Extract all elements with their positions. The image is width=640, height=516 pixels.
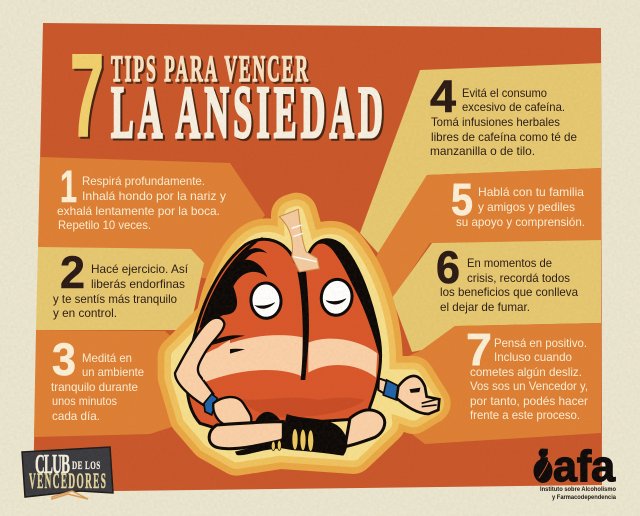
tip 5 text: Hablá con tu familia — [478, 185, 584, 199]
tip 7 text — [470, 336, 588, 422]
left wristband — [204, 394, 217, 415]
right hand — [397, 376, 439, 414]
right leg — [345, 410, 385, 447]
panel: tip 2 — [36, 247, 204, 330]
tip 7 text: Vos sos un Vencedor y, — [470, 379, 588, 393]
tip 4 text — [430, 86, 577, 158]
badge text — [29, 449, 106, 493]
tip 4 text: excesivo de cafeína. — [462, 100, 565, 114]
tip 4 text: Tomá infusiones herbales — [431, 115, 560, 129]
tip 2 text: liberás endorfinas — [91, 277, 185, 291]
right eye — [319, 277, 354, 317]
title — [70, 30, 385, 164]
tip 7 text: frente a este proceso. — [470, 408, 580, 422]
panel: tip 5 — [370, 168, 601, 298]
tip 4 number: 4 — [430, 71, 456, 122]
title line 1: TIPS PARA VENCER — [113, 51, 311, 92]
tip 2 number: 2 — [60, 247, 85, 298]
badge text: CLUB — [35, 449, 70, 479]
tip 3 text: un ambiente — [82, 365, 144, 379]
title line 2: LA ANSIEDAD — [113, 75, 385, 156]
tip 1 text: Inhalá hondo por la nariz y — [82, 189, 226, 203]
logo subtitle: y Farmacodependencia — [552, 494, 616, 501]
tip 4 text: Evitá el consumo — [462, 86, 547, 100]
feet and shadow — [235, 414, 347, 456]
badge text: DE LOS — [72, 459, 101, 473]
right arm and wristband — [378, 378, 400, 400]
tip 2 text: y te sentís más tranquilo — [53, 292, 177, 306]
lungs body — [187, 239, 381, 428]
tip 1 text: Repetilo 10 veces. — [58, 218, 151, 232]
tip 6 text — [440, 256, 578, 314]
tip 6 text: los beneficios que conlleva — [440, 285, 578, 299]
logo leaf vein — [539, 462, 548, 478]
left leg — [209, 422, 283, 449]
stripes — [203, 335, 245, 363]
tip 7 text: por tanto, podés hacer — [470, 394, 588, 408]
glow halo — [178, 213, 430, 455]
left hand — [213, 397, 251, 428]
trachea — [279, 209, 319, 272]
panel: tip 3 — [34, 330, 180, 437]
tip 1 background — [38, 157, 265, 280]
center line — [297, 272, 309, 380]
badge: Club de los Vencedores — [22, 447, 113, 499]
tip 3 text: Meditá en — [82, 351, 132, 365]
tip 3 text: unos minutos — [52, 394, 117, 408]
logo wordmark: afa — [553, 442, 616, 491]
tip 1 text — [57, 174, 226, 232]
tip 6 text: el dejar de fumar. — [440, 300, 530, 314]
tip 6 number: 6 — [436, 242, 460, 293]
tip 7 background — [395, 323, 601, 444]
tip 4 text: libres de cafeína como té de — [431, 130, 577, 144]
tip 2 text — [53, 262, 189, 320]
finger marks — [411, 389, 437, 407]
title big seven: 7 — [72, 32, 106, 164]
tip 6 text: crisis, recordá todos — [467, 271, 570, 285]
tip 5 text: y amigos y pediles — [478, 200, 575, 214]
arm seam cover — [201, 340, 230, 380]
logo dot — [538, 448, 548, 458]
right lung shadow — [312, 240, 379, 357]
tip 7 text: cometes algún desliz. — [470, 365, 582, 379]
tip 6 background — [392, 240, 601, 352]
tip 4 background — [360, 63, 601, 253]
tip 5 background — [370, 168, 601, 298]
title big seven: 7 — [70, 30, 104, 162]
badge plate — [22, 447, 113, 497]
badge text: VENCEDORES — [29, 468, 106, 493]
cigarette — [52, 491, 88, 499]
tip 7 text: Pensá en positivo. — [494, 336, 587, 350]
tip 2 background — [36, 247, 204, 330]
logo subtitle: Instituto sobre Alcoholismo — [540, 486, 616, 493]
tip 2 text: y en control. — [53, 306, 117, 320]
tip 4 text: manzanilla o de tilo. — [430, 144, 535, 158]
logo subtitle — [540, 486, 616, 501]
tip 1 number: 1 — [60, 161, 77, 212]
tip 3 text: tranquilo durante — [51, 380, 138, 394]
crotch shadow — [255, 412, 280, 422]
chest band right — [308, 339, 377, 377]
left eye — [250, 282, 282, 320]
logo leaf — [534, 459, 552, 483]
tip 6 text: En momentos de — [467, 256, 552, 270]
panel: tip 7 — [395, 323, 601, 444]
tip 3 background — [34, 330, 180, 437]
tip 2 text: Hacé ejercicio. Así — [91, 262, 189, 276]
tip 5 text — [456, 185, 585, 229]
belly fold — [237, 397, 365, 417]
illustration: meditating lungs character — [175, 209, 439, 456]
title line 2: LA ANSIEDAD — [111, 73, 383, 154]
panel: tip 4 — [360, 63, 601, 253]
tip 3 text — [51, 351, 144, 423]
tip 5 text: su apoyo y comprensión. — [456, 215, 585, 229]
left arm — [175, 318, 224, 405]
logo wordmark: i — [538, 442, 550, 491]
tip 1 text: Respirá profundamente. — [82, 174, 205, 188]
tip 3 number: 3 — [52, 334, 76, 385]
tip 1 text: exhalá lentamente por la boca. — [57, 204, 220, 218]
left lung shadow — [199, 237, 267, 328]
panel: tip 6 — [392, 240, 601, 352]
tip 5 number: 5 — [451, 174, 473, 225]
title line 1: TIPS PARA VENCER — [111, 49, 309, 90]
chest band left — [191, 335, 303, 388]
toes — [271, 429, 314, 451]
logo: iafa — [534, 442, 616, 501]
panel: tip 1 — [38, 157, 265, 280]
title big seven — [70, 30, 106, 164]
tip 7 number: 7 — [466, 324, 492, 375]
tip 7 text: Incluso cuando — [494, 350, 572, 364]
tip 3 text: cada día. — [52, 409, 100, 423]
